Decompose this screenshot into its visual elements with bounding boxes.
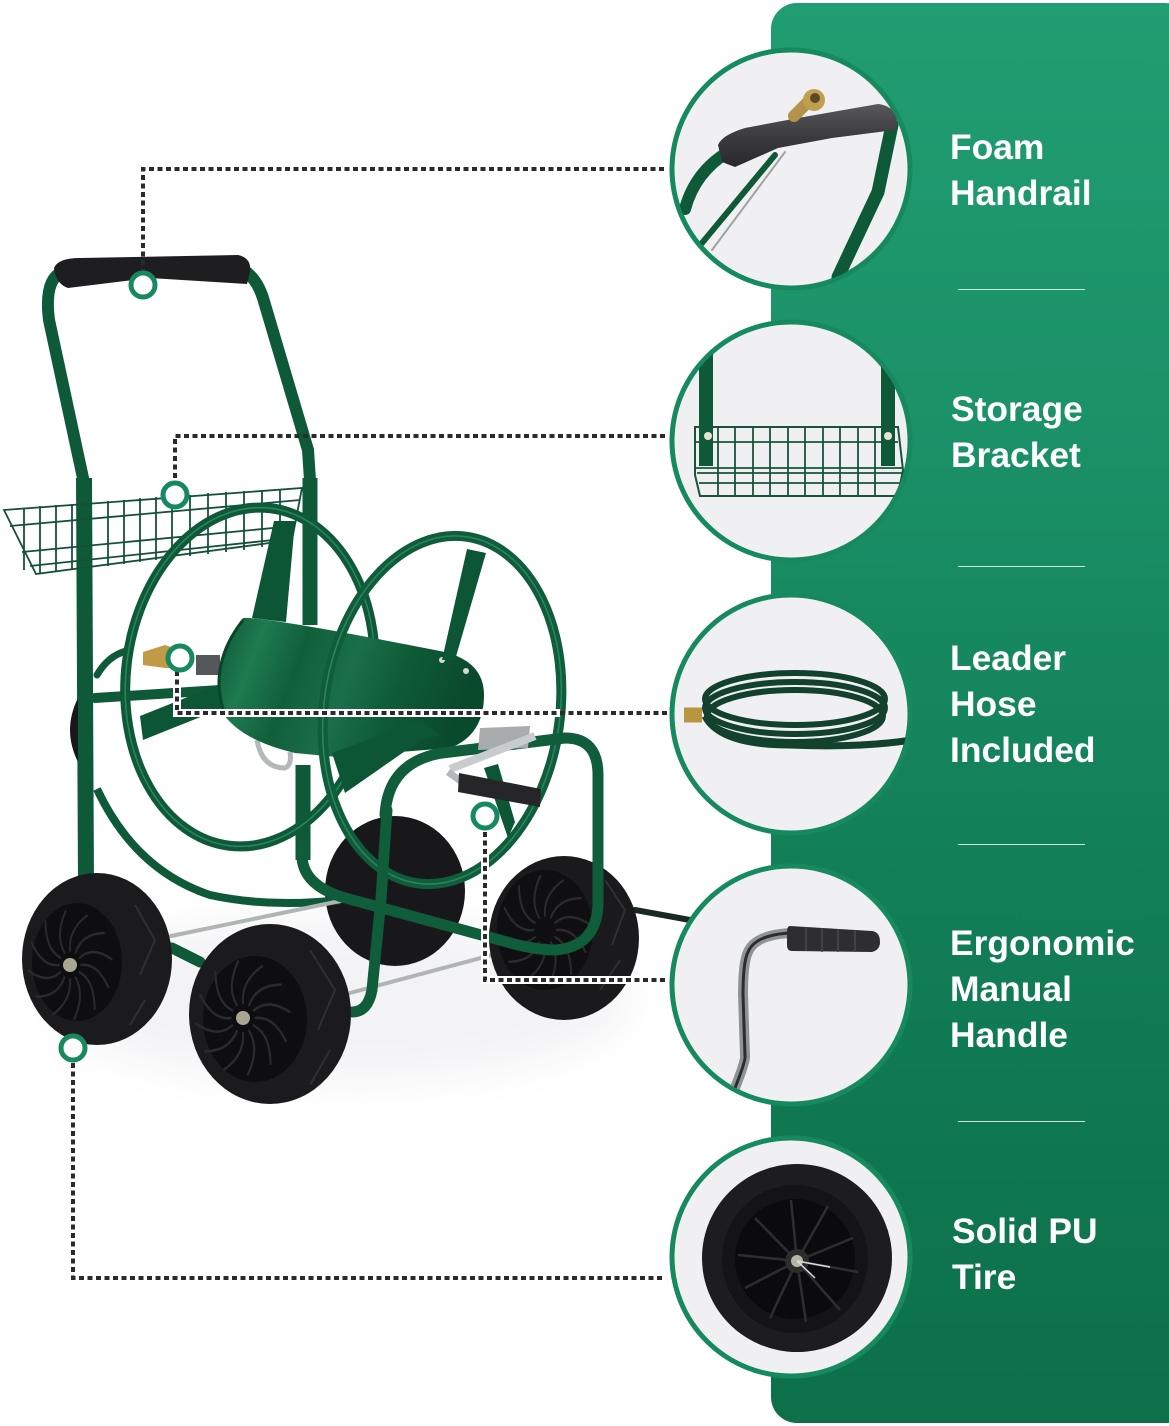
rear lower hoop [97,789,340,903]
front crank frame [302,738,598,1012]
green feature panel [771,3,1169,1423]
label: foam handrail: Foam [950,127,1044,167]
label: ergonomic manual handle: Ergonomic [950,923,1135,963]
divider [958,844,1085,845]
circle photo: tire [672,1138,910,1376]
brass hose connector [143,645,180,668]
rear reel hoop [106,493,394,861]
callout markers [61,273,497,1060]
feature: solid PU tire [672,1138,1098,1376]
label: leader hose: Included [950,730,1096,770]
divider [958,1121,1085,1122]
circle photo: basket [672,322,910,560]
ground shadow [50,920,630,1080]
storage basket [4,488,302,574]
feature: storage bracket [672,322,1083,560]
circle photo: handrail [672,50,910,288]
back wheel [325,816,465,966]
label: storage bracket: Storage [951,389,1083,429]
front reel hoop [301,520,583,900]
divider [958,289,1085,290]
hose drum [218,618,484,757]
right back wheel [489,856,639,1020]
feature: leader hose [672,595,1096,833]
circle photo: hose [672,595,912,833]
label: ergonomic manual handle: Manual [950,969,1072,1009]
feature: foam handrail [672,50,1092,288]
leader lines [73,169,667,1278]
label: ergonomic manual handle: Handle [950,1015,1068,1055]
crank handle [448,726,541,807]
cart handle frame [48,268,310,698]
label: solid PU tire: Solid PU [952,1211,1098,1251]
label: leader hose: Leader [950,638,1066,678]
axles and chrome rods [171,899,690,993]
label: leader hose: Hose [950,684,1037,724]
left front wheel [22,873,172,1045]
circle photo: handle [672,866,910,1104]
label: foam handrail: Handrail [950,173,1092,213]
label: storage bracket: Bracket [951,435,1081,475]
leader line halos over the cart [177,660,640,980]
hose reel cart product photo [4,255,690,1104]
foam handrail grip [54,255,250,288]
dark wheel behind post [70,698,78,762]
right front wheel [189,924,351,1104]
feature: ergonomic manual handle [672,866,1135,1104]
gray hose fitting [196,655,220,675]
label: solid PU tire: Tire [952,1257,1016,1297]
divider [958,566,1085,567]
chrome loop under drum [257,740,290,768]
